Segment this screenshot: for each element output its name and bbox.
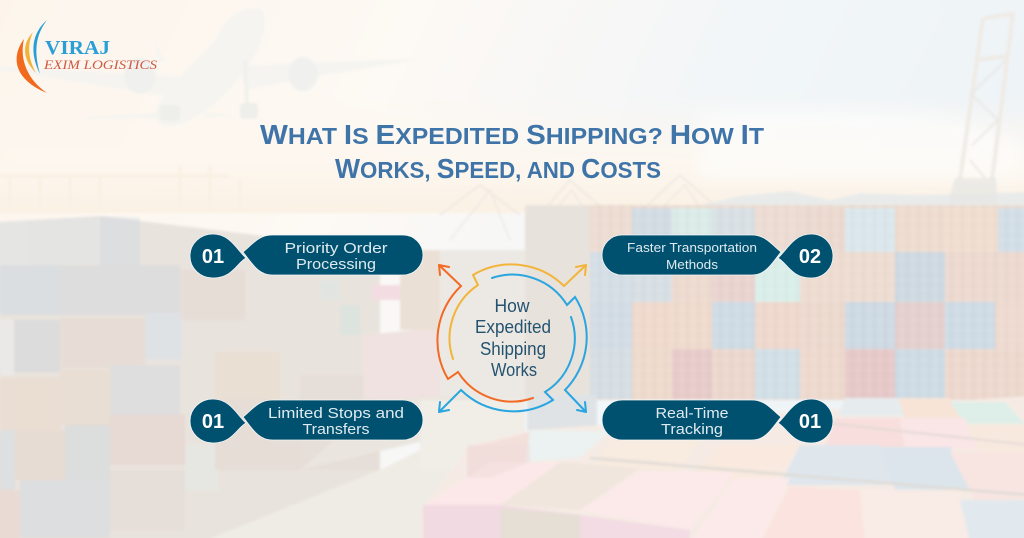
step 2: Faster Transportation Methods: 02 — [799, 246, 821, 268]
step 3: Limited Stops and Transfers: Limited Stops and — [268, 405, 404, 422]
right container wall — [525, 205, 590, 400]
left container stack — [0, 216, 380, 538]
logo wordmark: EXIM LOGISTICS — [43, 57, 158, 72]
cycle label: Expedited — [475, 317, 551, 337]
step 2: Faster Transportation Methods: Faster Transportation — [627, 241, 757, 255]
title: WHAT IS EXPEDITED SHIPPING? HOW IT — [260, 119, 765, 150]
title: WORKS, SPEED, AND COSTS — [335, 153, 661, 184]
logo wordmark — [43, 37, 158, 72]
hills — [700, 191, 1024, 212]
title — [260, 119, 765, 184]
step 4: Real-Time Tracking: Real-Time — [656, 405, 728, 422]
step 2: Faster Transportation Methods — [602, 234, 833, 278]
logo wordmark: VIRAJ — [45, 37, 110, 59]
step 1: Priority Order Processing: Priority Order — [284, 240, 388, 257]
step 1: Priority Order Processing: 01 — [202, 246, 224, 268]
cycle label: Shipping — [480, 339, 546, 359]
arrow: yellow — [450, 264, 586, 359]
step 1: Priority Order Processing: Processing — [296, 256, 376, 273]
arrow: blue lower — [439, 317, 575, 412]
step 1: Priority Order Processing — [190, 234, 423, 278]
cycle label: How — [494, 296, 530, 316]
step 3: Limited Stops and Transfers: Transfers — [302, 421, 370, 438]
cycle diagram: How Expedited Shipping Works — [437, 264, 587, 412]
step 4: Real-Time Tracking: 01 — [799, 411, 821, 433]
ground — [200, 425, 470, 538]
icon: logo swooshes — [17, 20, 47, 93]
plane — [0, 8, 420, 126]
cycle label — [475, 296, 551, 380]
step 2: Faster Transportation Methods: Methods — [666, 258, 718, 272]
cycle label: Works — [491, 360, 537, 380]
step 4: Real-Time Tracking — [602, 399, 833, 443]
step 3: Limited Stops and Transfers — [190, 399, 423, 443]
arrow: orange — [437, 265, 533, 402]
container tops — [420, 396, 1024, 538]
step 4: Real-Time Tracking: Tracking — [661, 421, 723, 438]
gantry crane — [960, 14, 1013, 180]
arrow: blue upper — [492, 275, 587, 412]
distant yard cranes — [0, 165, 240, 212]
logo — [17, 20, 158, 93]
step 3: Limited Stops and Transfers: 01 — [202, 411, 224, 433]
